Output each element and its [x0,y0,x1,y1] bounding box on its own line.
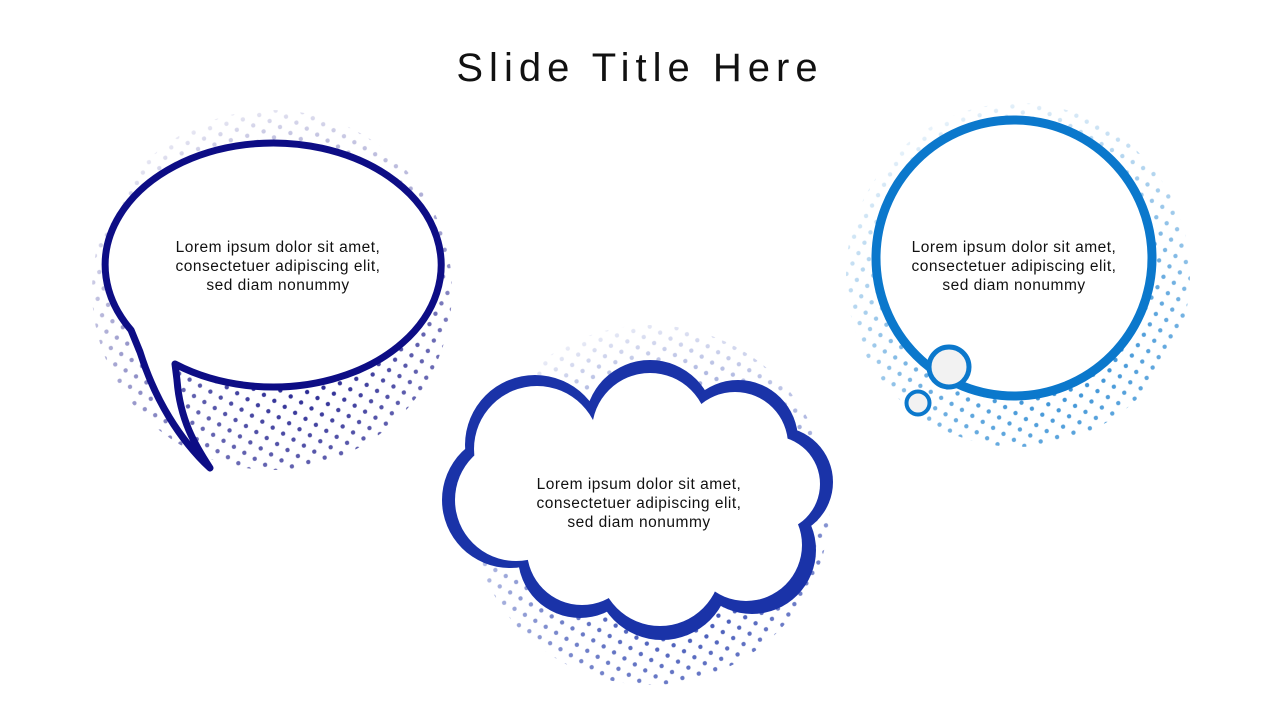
icon: thought bubble small [906,392,930,414]
text: thought circle: Lorem ipsum dolor sit amet, [912,239,1116,256]
text: speech bubble [176,239,380,294]
icon: thought bubble large [929,347,969,387]
panel: speech bubble [92,110,452,472]
panel: cloud [442,320,850,690]
title: Slide Title Here [456,46,824,90]
text: cloud: consectetuer adipiscing elit, [537,495,741,512]
text: cloud [537,476,741,531]
graphics [92,103,1190,685]
text: thought circle: consectetuer adipiscing elit, [912,258,1116,275]
text: thought circle [912,239,1116,294]
text: cloud: sed diam nonummy [567,514,711,531]
panel: thought circle [840,100,1200,450]
text: speech bubble: sed diam nonummy [206,277,350,294]
text: cloud: Lorem ipsum dolor sit amet, [537,476,741,493]
text: speech bubble: Lorem ipsum dolor sit amet, [176,239,380,256]
text: speech bubble: consectetuer adipiscing elit, [176,258,380,275]
text: thought circle: sed diam nonummy [942,277,1086,294]
